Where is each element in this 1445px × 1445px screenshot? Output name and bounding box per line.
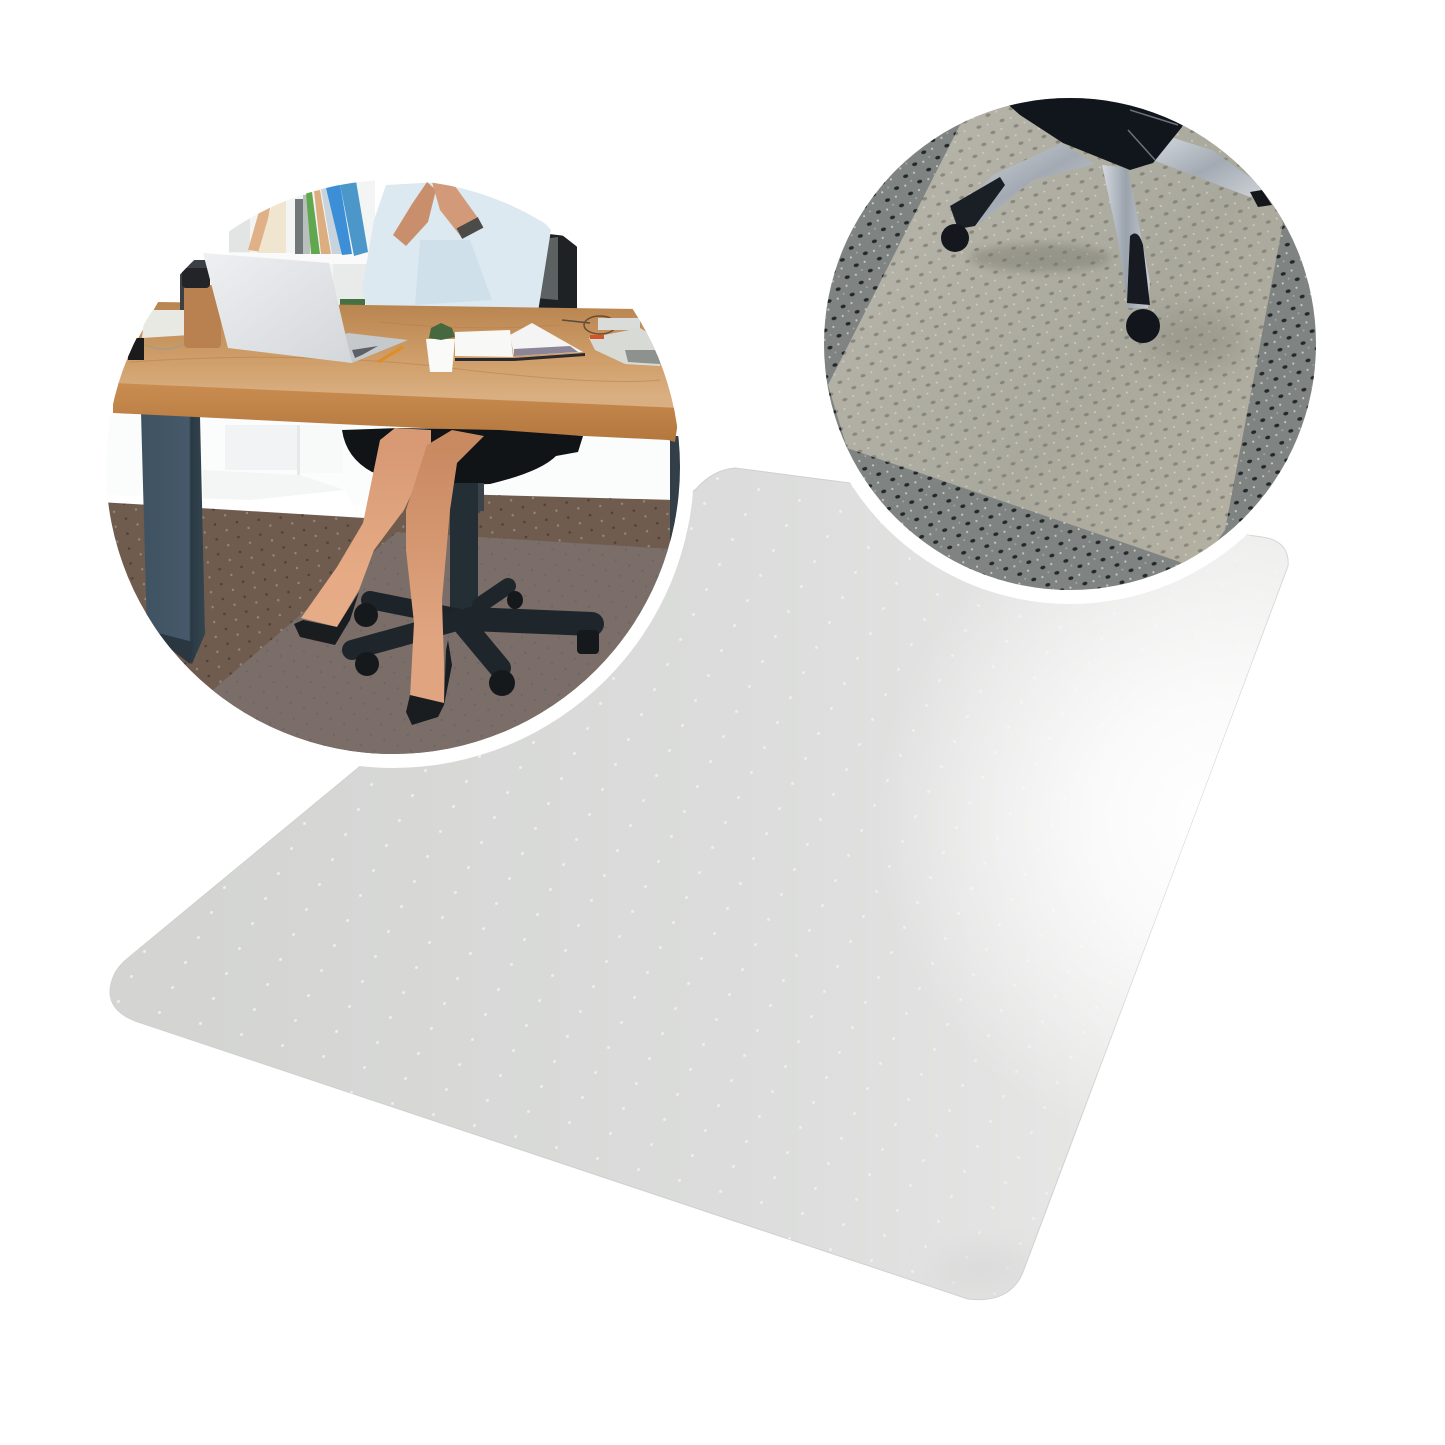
- desk front edge: [113, 383, 680, 442]
- photo: chair casters on mat close-up: [820, 95, 1320, 595]
- woman torso and arms: [362, 182, 551, 308]
- glasses and telephone: [562, 316, 660, 366]
- back shelves: [229, 180, 375, 308]
- chair seat: [342, 428, 583, 486]
- pencil: [378, 347, 403, 362]
- books: [248, 181, 368, 256]
- clear carpet chair mat: [100, 460, 1300, 1310]
- desk wood grain: [130, 322, 660, 382]
- white ring: close-up photo: [810, 84, 1330, 604]
- white ring: office photo: [92, 166, 694, 768]
- desk top: [113, 302, 700, 415]
- chair seat: [1009, 98, 1183, 170]
- carpet: [820, 95, 1320, 595]
- chair back: [538, 234, 577, 308]
- laptop: [203, 253, 408, 363]
- product composition: [108, 98, 1316, 1300]
- chair mat on carpet: [213, 532, 672, 770]
- photo: woman at desk on chair mat: [100, 175, 700, 770]
- crossed legs and heels: [294, 428, 484, 725]
- chair column and base: [352, 483, 599, 696]
- cup: [182, 268, 221, 348]
- notebook: [455, 323, 585, 361]
- far desk leg: [670, 436, 680, 542]
- desk leg: [141, 412, 205, 664]
- casters: [941, 177, 1272, 343]
- desk paper and cables: [128, 260, 210, 360]
- mat on carpet: [828, 95, 1283, 572]
- wall and shelving below desk: [203, 425, 344, 500]
- plant pot: [426, 323, 455, 372]
- chair base spokes: [957, 136, 1268, 308]
- carpet floor: [100, 492, 675, 770]
